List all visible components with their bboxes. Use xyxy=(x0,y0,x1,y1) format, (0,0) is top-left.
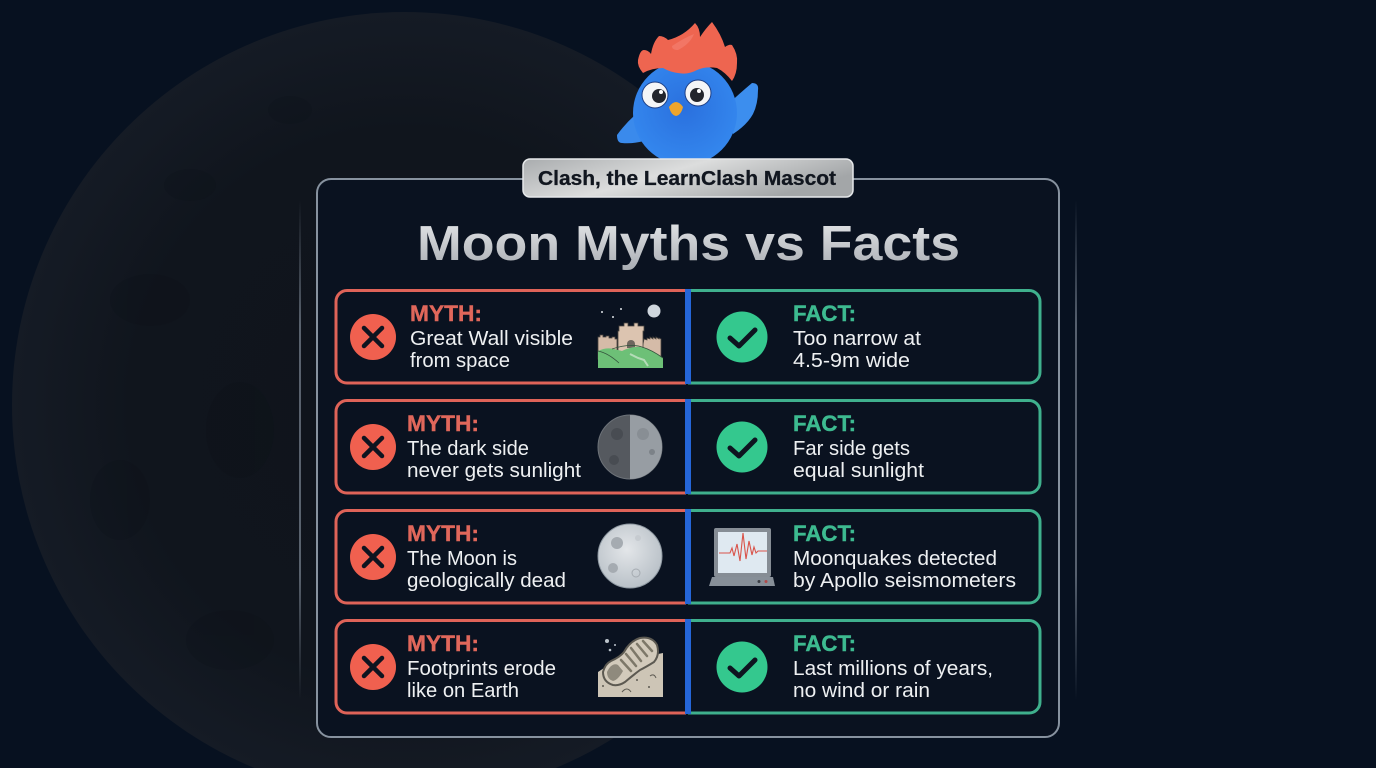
fact text xyxy=(793,521,1016,592)
fact text: Last millions of years, xyxy=(793,658,993,680)
fact box xyxy=(688,400,1040,493)
myth text xyxy=(407,411,581,482)
divider xyxy=(685,289,691,384)
divider xyxy=(685,399,691,494)
fact box xyxy=(688,620,1040,713)
beak xyxy=(669,102,683,116)
fact text: FACT: xyxy=(793,411,856,436)
fact text: Moonquakes detected xyxy=(793,548,997,570)
left eye xyxy=(642,82,668,108)
myth text xyxy=(407,521,566,592)
myth box xyxy=(336,510,686,603)
fact text: no wind or rain xyxy=(793,680,930,702)
myth box xyxy=(336,400,686,493)
icon: full moon xyxy=(598,524,662,588)
icon: X xyxy=(350,314,396,360)
title: Moon Myths vs Facts xyxy=(417,217,960,271)
side glow lines xyxy=(299,200,1077,700)
fact text xyxy=(793,631,993,702)
row 1: Great Wall xyxy=(336,289,1040,384)
left wing xyxy=(617,115,644,143)
right wing xyxy=(725,83,758,134)
myth text xyxy=(410,301,573,372)
icon: X xyxy=(350,424,396,470)
right eye xyxy=(685,80,711,106)
mascot: Clash xyxy=(617,22,758,165)
fact text: Far side gets xyxy=(793,438,910,460)
icon: X xyxy=(350,644,396,690)
icon: X xyxy=(350,534,396,580)
icon: check xyxy=(716,642,768,692)
myth text: MYTH: xyxy=(410,301,482,326)
mascot badge: Clash, the LearnClash Mascot xyxy=(538,168,836,190)
icon: half moon xyxy=(598,415,662,479)
myth box xyxy=(336,620,686,713)
hair highlight xyxy=(672,34,694,50)
fact box xyxy=(688,510,1040,603)
body xyxy=(633,61,737,165)
fact text: by Apollo seismometers xyxy=(793,570,1016,592)
mascot badge xyxy=(523,159,853,197)
row 3: geologically dead xyxy=(336,509,1040,604)
myth text: MYTH: xyxy=(407,411,479,436)
myth text: MYTH: xyxy=(407,631,479,656)
main panel xyxy=(317,179,1059,737)
icon: seismograph laptop xyxy=(709,528,775,586)
fact text xyxy=(793,411,924,482)
icon: Great Wall xyxy=(598,304,663,368)
myth text: never gets sunlight xyxy=(407,460,581,482)
myth text xyxy=(407,631,556,702)
myth box xyxy=(336,290,686,383)
myth text: The Moon is xyxy=(407,548,517,570)
moon backdrop xyxy=(12,12,798,768)
myth text: like on Earth xyxy=(407,680,519,702)
myth text: from space xyxy=(410,350,510,372)
hair xyxy=(638,22,737,81)
fact text: 4.5-9m wide xyxy=(793,350,910,372)
row 2: dark side xyxy=(336,399,1040,494)
myth text: The dark side xyxy=(407,438,529,460)
icon: footprint xyxy=(598,638,663,697)
fact text: Too narrow at xyxy=(793,328,921,350)
divider xyxy=(685,619,691,714)
fact text: FACT: xyxy=(793,301,856,326)
icon: check xyxy=(716,312,768,362)
fact text: FACT: xyxy=(793,521,856,546)
myth text: Footprints erode xyxy=(407,658,556,680)
fact text xyxy=(793,301,921,372)
icon: check xyxy=(716,422,768,472)
myth text: Great Wall visible xyxy=(410,328,573,350)
divider xyxy=(685,509,691,604)
fact text: FACT: xyxy=(793,631,856,656)
row 4: footprints xyxy=(336,619,1040,714)
fact box xyxy=(688,290,1040,383)
myth text: geologically dead xyxy=(407,570,566,592)
myth text: MYTH: xyxy=(407,521,479,546)
fact text: equal sunlight xyxy=(793,460,924,482)
